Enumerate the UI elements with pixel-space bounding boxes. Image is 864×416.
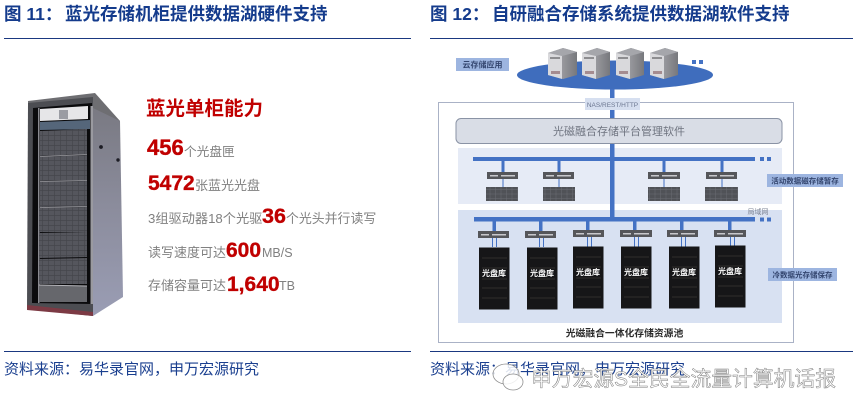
protocol label: NAS/REST/HTTP bbox=[587, 102, 638, 109]
stat: 456 trays: 个光盘匣 bbox=[184, 144, 235, 159]
heading: figure 12: 图 12： bbox=[430, 4, 489, 24]
stat: 456 trays bbox=[147, 135, 235, 160]
heading: capacity: 蓝光单柜能力 bbox=[146, 98, 263, 120]
stat: 1,640 TB: 存储容量可达 bbox=[148, 278, 226, 293]
heading: figure 11: 蓝光存储机柜提供数据湖硬件支持 bbox=[65, 4, 328, 24]
diagram: converged storage architecture bbox=[438, 48, 843, 342]
cold tier links bbox=[492, 237, 735, 247]
stat: 600 MB/S: 600 bbox=[226, 239, 261, 262]
main trunk bbox=[610, 89, 614, 218]
heading: figure 12: 自研融合存储系统提供数据湖软件支持 bbox=[492, 4, 790, 24]
stat: 1,640 TB: TB bbox=[279, 279, 295, 293]
stat: 5472 discs: 张蓝光光盘 bbox=[195, 178, 260, 193]
cloud app label: 云存储应用 bbox=[462, 60, 502, 70]
stat: 600 MB/S: MB/S bbox=[262, 246, 293, 260]
optical libraries: 光盘库 bbox=[672, 267, 696, 277]
source: left: 资料来源：易华录官网，申万宏源研究 bbox=[4, 361, 259, 378]
panel: cold data bbox=[458, 210, 782, 323]
stat: 36 heads: 36 bbox=[262, 204, 286, 228]
active tier label: 活动数据磁存储暂存 bbox=[771, 176, 839, 186]
cold tier switches bbox=[478, 230, 746, 238]
stat: 1,640 TB: 1,640 bbox=[227, 273, 280, 296]
LAN label: 局域网 bbox=[748, 207, 768, 216]
cold tier bus bbox=[474, 217, 771, 231]
optical libraries bbox=[479, 246, 746, 310]
optical libraries: 光盘库 bbox=[718, 266, 742, 276]
stat: 5472 discs bbox=[148, 172, 260, 195]
source: right: 资料来源：易华录官网，申万宏源研究 bbox=[430, 361, 685, 378]
cloud ellipse bbox=[517, 60, 713, 90]
management software bar: 光磁融合存储平台管理软件 bbox=[553, 124, 685, 138]
rack rails bbox=[90, 106, 93, 304]
cloud app label bbox=[456, 58, 509, 71]
stat: 1,640 TB bbox=[148, 273, 295, 296]
pool caption: 光磁融合一体化存储资源池 bbox=[566, 326, 683, 340]
active tier bus bbox=[473, 157, 771, 187]
stat: 456 trays: 456 bbox=[147, 135, 184, 160]
stat: 36 heads: 个光头并行读写 bbox=[286, 211, 376, 226]
stat: 5472 discs: 5472 bbox=[148, 172, 195, 195]
protocol label bbox=[585, 98, 640, 110]
cold tier label bbox=[768, 268, 837, 281]
optical libraries: 光盘库 bbox=[530, 268, 554, 278]
watermark: 申万宏源S全民全流量计算机话报 bbox=[531, 368, 836, 391]
optical libraries: 光盘库 bbox=[482, 268, 506, 278]
icon: chat bubbles bbox=[493, 364, 523, 390]
stat: 36 heads bbox=[148, 204, 376, 228]
library shelves bbox=[482, 256, 743, 298]
panel: active data bbox=[458, 148, 782, 204]
outer frame bbox=[438, 102, 794, 342]
cold tier label: 冷数据光存储保存 bbox=[772, 270, 833, 280]
servers bbox=[548, 48, 703, 79]
management software bar bbox=[456, 118, 782, 144]
panel: blue-ray capacity text bbox=[146, 98, 376, 296]
active tier devices bbox=[486, 172, 738, 201]
active tier label bbox=[767, 174, 843, 187]
stat: 36 heads: 3组驱动器18个光驱 bbox=[148, 211, 262, 226]
heading: figure 11: 图 11： bbox=[4, 4, 62, 24]
icon: storage rack bbox=[27, 93, 123, 316]
stat: 600 MB/S: 读写速度可达 bbox=[148, 245, 226, 260]
stat: 600 MB/S bbox=[148, 239, 293, 262]
optical libraries: 光盘库 bbox=[624, 267, 648, 277]
optical libraries: 光盘库 bbox=[576, 267, 600, 277]
